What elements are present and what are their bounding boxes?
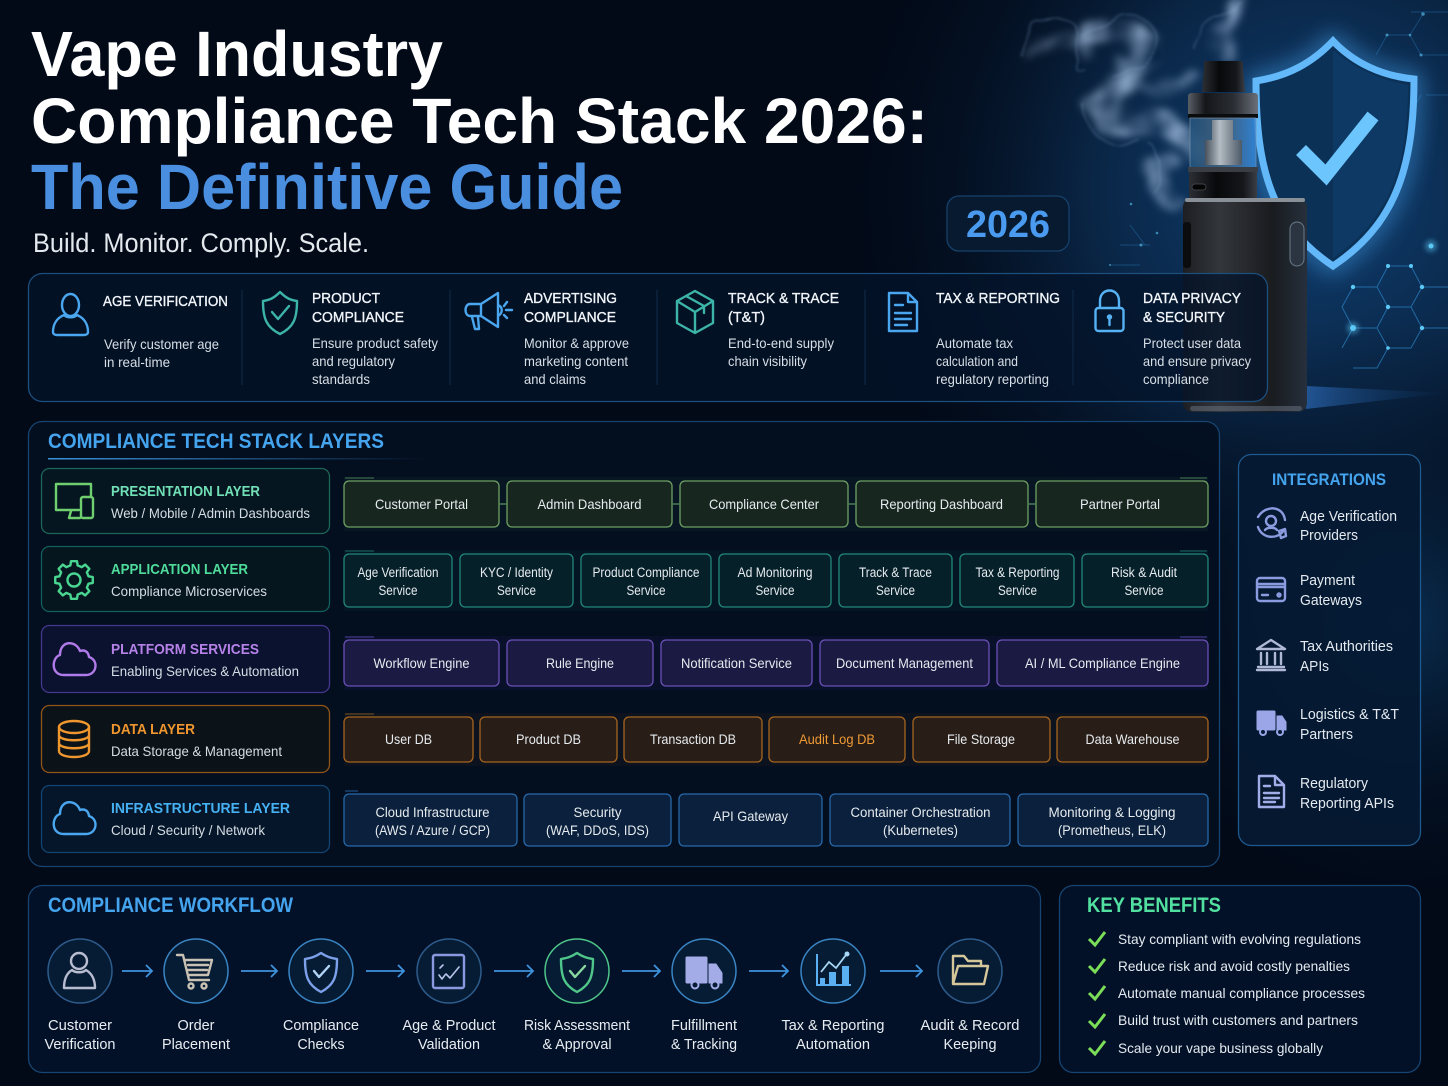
row: infrastructure components <box>344 791 1208 846</box>
layer: platform services: PLATFORM SERVICES <box>111 641 259 658</box>
row: data stores: Audit Log DB <box>799 731 875 747</box>
layer: platform services: Enabling Services & Automation <box>111 663 299 679</box>
row: infrastructure components: (Kubernetes) <box>883 823 958 838</box>
panel: compliance tech stack layers <box>28 422 1220 866</box>
row: application services: Service <box>497 583 536 598</box>
layer: data: DATA LAYER <box>111 721 195 738</box>
layer: presentation <box>42 468 330 534</box>
row: infrastructure components: Cloud Infrastructure <box>376 805 490 820</box>
integration: age verification providers <box>1258 508 1397 544</box>
step: fulfillment and tracking <box>671 939 738 1053</box>
integration: logistics partners <box>1257 707 1399 743</box>
row: application services: Age Verification <box>358 565 438 580</box>
step: customer verification <box>44 939 116 1053</box>
integration: logistics partners: Partners <box>1300 727 1353 743</box>
step: tax and reporting automation: Tax & Reporting <box>782 1017 884 1034</box>
step: order placement: Order <box>178 1017 215 1034</box>
heading: tech stack layers: COMPLIANCE TECH STACK LAYERS <box>48 430 384 453</box>
step: tax and reporting automation: Automation <box>796 1036 870 1053</box>
integration: tax authorities apis: APIs <box>1300 659 1329 675</box>
feature: advertising compliance: ADVERTISING <box>524 290 617 307</box>
step: age and product validation: Validation <box>418 1036 480 1053</box>
layer: application: Compliance Microservices <box>111 583 267 599</box>
subtitle: Build. Monitor. Comply. Scale. <box>33 228 369 258</box>
feature: tax and reporting: TAX & REPORTING <box>936 290 1060 307</box>
title <box>31 18 928 223</box>
feature: track and trace <box>677 290 839 369</box>
step: fulfillment and tracking: Fulfillment <box>671 1017 738 1034</box>
benefit list: Automate manual compliance processes <box>1118 985 1365 1001</box>
panel: compliance workflow <box>28 886 1040 1072</box>
feature: advertising compliance: Monitor & approve <box>524 335 629 351</box>
step: risk assessment and approval <box>524 939 631 1053</box>
step: customer verification: Customer <box>48 1017 112 1034</box>
layer: presentation: PRESENTATION LAYER <box>111 483 260 500</box>
feature: product compliance: standards <box>312 371 370 387</box>
row: infrastructure components: (Prometheus, ELK) <box>1058 823 1166 838</box>
feature: tax and reporting: Automate tax <box>936 335 1013 351</box>
feature: track and trace: TRACK & TRACE <box>728 290 839 307</box>
step: risk assessment and approval: & Approval <box>542 1036 612 1053</box>
layer: platform services <box>42 626 330 692</box>
panel: key benefits <box>1060 886 1420 1072</box>
step: age and product validation <box>402 939 496 1053</box>
row: data stores: Transaction DB <box>650 731 736 747</box>
floor reflection <box>1306 386 1448 409</box>
row: data stores: User DB <box>385 731 432 747</box>
feature: data privacy and security: and ensure privacy <box>1143 353 1251 369</box>
integration: tax authorities apis <box>1257 639 1393 675</box>
feature: advertising compliance: COMPLIANCE <box>524 309 616 326</box>
row: platform components: AI / ML Compliance Engine <box>1025 655 1180 671</box>
feature: tax and reporting <box>889 290 1060 387</box>
feature: age verification: AGE VERIFICATION <box>103 293 228 310</box>
step: customer verification: Verification <box>44 1036 116 1053</box>
layer: data <box>42 706 330 772</box>
row: data stores: Product DB <box>516 731 581 747</box>
row: application services: Tax & Reporting <box>976 565 1060 580</box>
step: compliance checks <box>283 939 359 1053</box>
layer: infrastructure <box>42 786 330 852</box>
benefit list: Build trust with customers and partners <box>1118 1012 1358 1028</box>
row: application services: Service <box>626 583 666 598</box>
row: platform components: Document Management <box>836 655 973 671</box>
row: presentation components <box>344 477 1208 531</box>
row: infrastructure components: Security <box>574 805 622 820</box>
shield with check <box>1256 41 1414 266</box>
panel: compliance workflow: COMPLIANCE WORKFLOW <box>48 894 293 917</box>
row: platform components <box>344 636 1208 690</box>
title: Compliance Tech Stack 2026: <box>31 85 928 157</box>
benefit list <box>1118 931 1365 1056</box>
step: compliance checks: Compliance <box>283 1017 359 1034</box>
step: fulfillment and tracking: & Tracking <box>671 1036 737 1053</box>
row: presentation components: Compliance Center <box>709 496 819 512</box>
layer: presentation: Web / Mobile / Admin Dashboards <box>111 505 310 521</box>
feature: data privacy and security: Protect user data <box>1143 335 1241 351</box>
row: application services: KYC / Identity <box>480 565 553 580</box>
feature: age verification: in real-time <box>104 354 170 370</box>
feature: advertising compliance: marketing content <box>524 353 628 369</box>
feature: age verification: Verify customer age <box>104 336 219 352</box>
row: application services <box>344 550 1208 611</box>
integration: age verification providers: Providers <box>1300 528 1358 544</box>
layer: application <box>42 546 330 612</box>
feature: track and trace: chain visibility <box>728 353 807 369</box>
workflow arrows <box>122 965 922 977</box>
row: application services: Track & Trace <box>859 565 932 580</box>
integration: regulatory reporting apis <box>1259 776 1394 812</box>
feature: track and trace: End-to-end supply <box>728 335 834 351</box>
row: infrastructure components: Container Orchestration <box>850 805 990 820</box>
layer: infrastructure: INFRASTRUCTURE LAYER <box>111 800 290 817</box>
feature: product compliance: Ensure product safety <box>312 335 438 351</box>
panel: integrations <box>1238 454 1420 846</box>
year badge <box>947 196 1069 251</box>
step: audit and record keeping: Audit & Record <box>920 1017 1020 1034</box>
step: order placement <box>162 939 231 1053</box>
integration: regulatory reporting apis: Regulatory <box>1300 776 1369 792</box>
step: age and product validation: Age & Product <box>402 1017 496 1034</box>
feature: data privacy and security: & SECURITY <box>1143 309 1225 326</box>
integration: tax authorities apis: Tax Authorities <box>1300 639 1393 655</box>
smoke <box>1020 0 1245 200</box>
feature: advertising compliance <box>466 290 629 387</box>
row: application services: Product Compliance <box>592 565 700 580</box>
step: tax and reporting automation <box>782 939 884 1053</box>
row: application services: Service <box>756 583 794 598</box>
panel: core compliance features <box>28 274 1268 402</box>
feature: track and trace: (T&T) <box>728 309 765 326</box>
step: compliance checks: Checks <box>298 1036 344 1053</box>
title: The Definitive Guide <box>31 151 623 223</box>
feature: product compliance: COMPLIANCE <box>312 309 404 326</box>
integration: payment gateways <box>1257 573 1362 609</box>
benefit list: Stay compliant with evolving regulations <box>1118 931 1361 947</box>
layer: data: Data Storage & Management <box>111 743 282 759</box>
feature: tax and reporting: calculation and <box>936 353 1018 369</box>
step: audit and record keeping <box>920 939 1020 1053</box>
vape device <box>1183 61 1307 412</box>
row: presentation components: Customer Portal <box>375 496 468 512</box>
layer: infrastructure: Cloud / Security / Network <box>111 822 266 838</box>
row: application services: Risk & Audit <box>1111 565 1177 580</box>
feature: product compliance <box>263 290 438 387</box>
row: data stores: File Storage <box>947 731 1015 747</box>
row: application services: Service <box>998 583 1037 598</box>
panel: key benefits: KEY BENEFITS <box>1087 894 1221 917</box>
integration: payment gateways: Gateways <box>1300 593 1362 609</box>
row: presentation components: Partner Portal <box>1080 496 1160 512</box>
feature: advertising compliance: and claims <box>524 371 586 387</box>
row: data stores <box>344 713 1208 766</box>
step: order placement: Placement <box>162 1036 231 1053</box>
feature: product compliance: PRODUCT <box>312 290 380 307</box>
year badge: 2026 <box>966 204 1050 246</box>
feature: data privacy and security <box>1096 290 1251 387</box>
integration: age verification providers: Age Verification <box>1300 509 1397 525</box>
hexagon network <box>1109 12 1448 368</box>
row: presentation components: Reporting Dashboard <box>880 496 1003 512</box>
row: infrastructure components: (WAF, DDoS, IDS) <box>546 823 649 838</box>
layer: application: APPLICATION LAYER <box>111 561 248 578</box>
benefit list: Reduce risk and avoid costly penalties <box>1118 958 1350 974</box>
step: audit and record keeping: Keeping <box>944 1036 996 1053</box>
feature: data privacy and security: DATA PRIVACY <box>1143 290 1241 307</box>
panel: integrations: INTEGRATIONS <box>1272 470 1386 489</box>
title: Vape Industry <box>31 18 443 90</box>
benefit list: Scale your vape business globally <box>1118 1040 1323 1056</box>
row: application services: Service <box>1124 583 1164 598</box>
integration: logistics partners: Logistics & T&T <box>1300 707 1399 723</box>
feature: product compliance: and regulatory <box>312 353 395 369</box>
row: data stores: Data Warehouse <box>1086 731 1180 747</box>
row: infrastructure components: Monitoring & Logging <box>1048 805 1176 820</box>
feature: age verification <box>53 293 228 370</box>
integration: payment gateways: Payment <box>1300 573 1355 589</box>
feature: tax and reporting: regulatory reporting <box>936 371 1049 387</box>
row: presentation components: Admin Dashboard <box>538 496 642 512</box>
row: application services: Service <box>876 583 915 598</box>
row: platform components: Notification Service <box>681 655 792 671</box>
row: infrastructure components: (AWS / Azure / GCP) <box>375 823 490 838</box>
benefit checkmarks <box>1089 932 1105 1054</box>
row: application services: Ad Monitoring <box>738 565 812 580</box>
feature: data privacy and security: compliance <box>1143 371 1209 387</box>
row: platform components: Rule Engine <box>546 655 614 671</box>
row: application services: Service <box>378 583 418 598</box>
integration: regulatory reporting apis: Reporting APIs <box>1300 796 1394 812</box>
step: risk assessment and approval: Risk Assessment <box>524 1017 631 1034</box>
row: infrastructure components: API Gateway <box>713 808 788 824</box>
row: platform components: Workflow Engine <box>374 655 470 671</box>
